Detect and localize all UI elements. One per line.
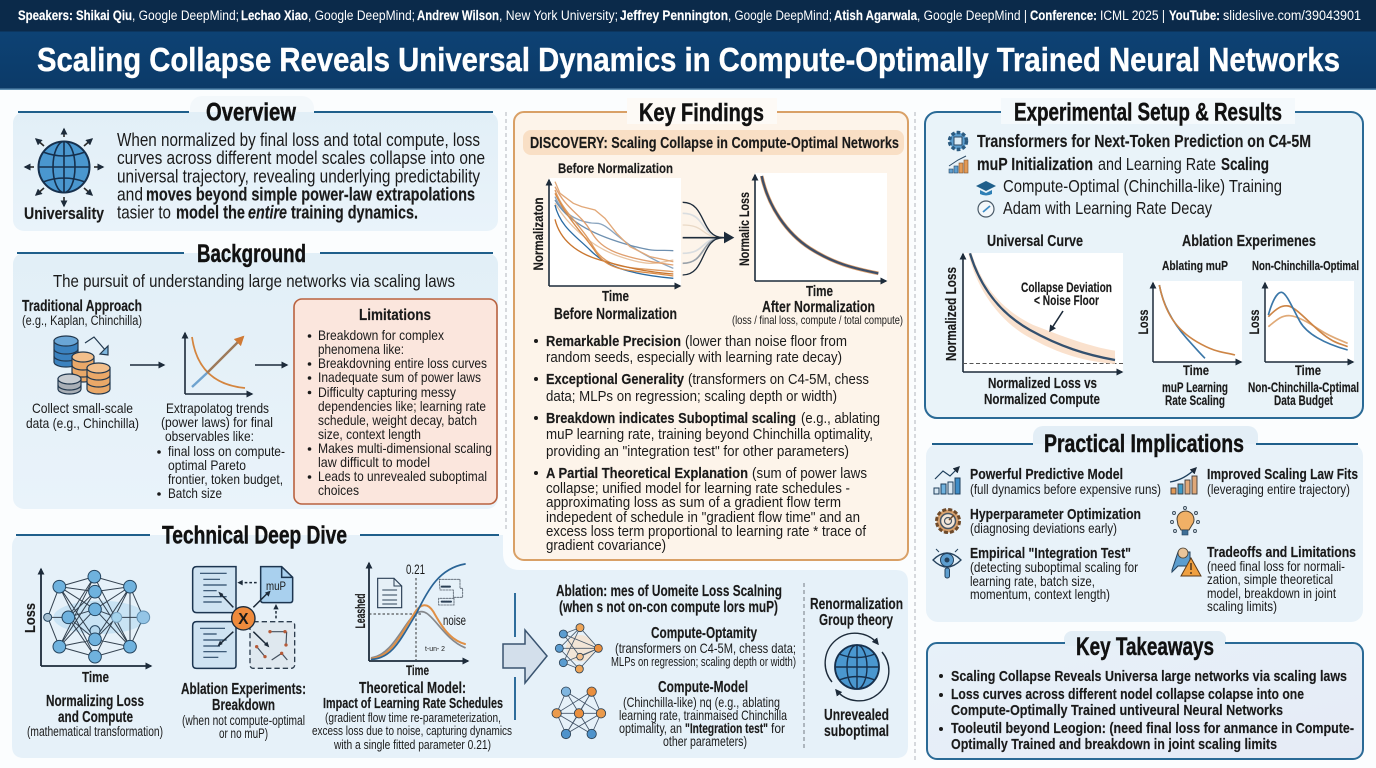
text block: overview: curves across different model scales collapse into one: [117, 148, 485, 168]
panel: limitations: Limitations: [359, 307, 431, 324]
label: unrevealed suboptimal: [824, 707, 889, 740]
caption: ablation experiments: or no muP): [219, 726, 268, 741]
panel: key takeaways: [927, 631, 1363, 759]
item: tradeoffs and limitations: scaling limits): [1207, 598, 1277, 614]
caption: ablation experiments: Ablation Experiments:: [181, 681, 306, 698]
chart: universal curve: Universal Curve: [987, 233, 1083, 250]
chart: power-law trends: [185, 333, 252, 394]
icon: dial: [978, 201, 994, 217]
speakers bar: , Google DeepMind;: [132, 8, 239, 23]
speakers bar: Jeffrey Pennington: [620, 8, 728, 23]
text block: overview: [117, 130, 485, 223]
chart: after normalization: [732, 173, 903, 327]
setup line 2: [977, 154, 1269, 174]
chart: ablating mup: [1135, 258, 1242, 408]
item: predictive model: Powerful Predictive Model: [970, 466, 1123, 483]
text: compute-model: [619, 679, 787, 749]
icon: light bulb: [1170, 506, 1200, 535]
icon: eye magnifier: [933, 549, 961, 578]
text block: takeaways: Loss curves across different nodel collapse colapse into one: [951, 686, 1304, 703]
chart: non-chinchilla-optimal: Data Budget: [1274, 393, 1333, 408]
caption: collect data: Collect small-scale: [32, 400, 133, 416]
arrow: big block arrow: [503, 630, 547, 683]
label: renormalization group theory: [810, 596, 903, 629]
label: unrevealed suboptimal: suboptimal: [824, 723, 889, 740]
text: compute-model: "Integration test": [685, 720, 768, 736]
chart: theoretical model: t-un- 2: [425, 646, 445, 653]
panel: limitations: Leads to unrevealed suboptimal: [318, 468, 487, 484]
setup line 3: Compute-Optimal (Chinchilla-like) Training: [1003, 176, 1282, 196]
chart: ablating mup: Time: [1183, 362, 1209, 378]
chart: ablating mup: Rate Scaling: [1165, 393, 1225, 408]
caption: theoretical model: [312, 680, 512, 752]
text block: findings bullets: muP learning rate, training beyond Chinchilla optimality,: [546, 426, 873, 443]
heading: experimental setup: Experimental Setup & Results: [1014, 98, 1282, 126]
item: tradeoffs and limitations: zation, simple theoretical: [1207, 571, 1333, 587]
chart: theoretical model: 0.21: [406, 562, 425, 577]
discovery banner: DISCOVERY: Scaling Collapse in Compute-Optimal Networks: [530, 135, 899, 152]
text: compute-model: Compute-Model: [658, 679, 748, 696]
icon: compute-optimal network: [555, 624, 602, 673]
chart: before normalization: Normalizaton: [530, 198, 546, 270]
icon: tradeoffs warning: [1172, 548, 1201, 576]
text block: findings bullets: Exceptional Generality: [546, 371, 685, 388]
speakers bar: , Google DeepMind;: [308, 8, 415, 23]
text: compute-model: (Chinchilla-like) nq (e.g., ablating: [623, 694, 780, 710]
item: integration test: [970, 545, 1138, 602]
caption: collect data: data (e.g., Chinchilla): [26, 415, 139, 431]
speakers bar: Lechao Xiao: [241, 8, 308, 23]
chart: before normalization: Before Normalization: [558, 160, 673, 176]
panel: limitations: Breakdovning entire loss curves: [318, 355, 487, 371]
icon: databases: [54, 336, 110, 394]
panel: experimental setup and results: [925, 98, 1363, 418]
chart: theoretical model: Leashed: [352, 594, 368, 628]
text: compute-optamity: Compute-Optamity: [651, 625, 757, 642]
text block: findings bullets: (lower than noise floor from: [685, 333, 847, 350]
speakers bar: [0, 0, 1376, 32]
text block: findings bullets: (transformers on C4-5M, chess: [688, 371, 869, 388]
chart: before normalization: Time: [602, 289, 629, 305]
label: renormalization group theory: Group theory: [819, 612, 893, 629]
item: hyperparameter optimization: [970, 506, 1141, 536]
item: hyperparameter optimization: Hyperparameter Optimization: [970, 506, 1141, 523]
text block: findings bullets: providing an "integration test" for other parameters): [546, 443, 849, 460]
text block: findings bullets: [534, 333, 880, 554]
caption: ablation experiments: [181, 681, 306, 741]
heading: practical implications: Practical Implications: [1044, 430, 1244, 458]
chart: after normalization: Normalic Loss: [736, 192, 752, 266]
icon: mortarboard: [976, 181, 996, 196]
text block: extrapolating trends: Extrapolatog trends: [166, 400, 269, 416]
caption: theoretical model: Theoretical Model:: [359, 680, 466, 697]
text block: overview: and: [117, 185, 143, 205]
text: compute-model: other parameters): [663, 733, 747, 749]
caption: normalizing loss: Normalizing Loss: [46, 693, 144, 710]
subtitle: The pursuit of understanding large networks via scaling laws: [53, 271, 455, 291]
icon: growth bars: [949, 156, 968, 173]
chart: theoretical model: Time: [406, 663, 429, 678]
speakers bar: YouTube:: [1169, 8, 1220, 23]
icon label: universality: Universality: [24, 205, 105, 223]
text block: overview: tasier to: [117, 203, 171, 223]
heading: ablation loss scaling: (when s not on-con compute lors muP): [559, 599, 778, 616]
text block: extrapolating trends: Batch size: [168, 485, 222, 501]
text block: extrapolating trends: [157, 400, 285, 501]
speakers bar: ICML 2025 |: [1100, 8, 1165, 23]
panel: limitations: Breakdown for complex: [318, 327, 444, 343]
text: compute-model: learning rate, trainmaised Chinchilla: [619, 707, 787, 723]
chart: before normalization: Before Normalization: [554, 306, 677, 323]
panel: limitations: size, context length: [318, 426, 421, 442]
panel: key findings: [514, 98, 908, 560]
panel: limitations: schedule, weight decay, batch: [318, 412, 477, 428]
panel: limitations: law difficult to model: [318, 454, 430, 470]
heading: key findings: Key Findings: [639, 99, 764, 127]
traditional approach label: Traditional Approach: [22, 298, 142, 315]
caption: normalizing loss: and Compute: [58, 709, 133, 726]
item: tradeoffs and limitations: model, breakdown in joint: [1207, 585, 1336, 601]
text block: overview: training dynamics.: [291, 203, 418, 223]
speakers bar: Andrew Wilson: [417, 8, 499, 23]
caption: theoretical model: excess loss due to noise, capturing dynamics: [312, 723, 512, 738]
text block: extrapolating trends: optimal Pareto: [168, 457, 246, 473]
text block: findings bullets: indepedent of schedule in "gradient flow time" and an: [546, 509, 860, 526]
text block: findings bullets: (e.g., ablating: [801, 410, 880, 427]
speakers bar: , Google DeepMind |: [917, 8, 1027, 23]
traditional approach label: [22, 298, 142, 328]
caption: theoretical model: with a single fitted parameter 0.21): [333, 737, 491, 752]
item: tradeoffs and limitations: [1207, 544, 1356, 614]
text block: findings bullets: excess loss term proportional to learning rate * trace of: [546, 523, 867, 540]
arrow: collapse funnel: [683, 202, 734, 275]
diagram: network on loss axes: Loss: [22, 603, 39, 633]
discovery banner: [523, 130, 904, 155]
diagram: network on loss axes: Time: [82, 670, 109, 686]
traditional approach label: (e.g., Kaplan, Chinchilla): [22, 313, 142, 328]
chart: after normalization: Time: [806, 284, 833, 300]
diagram: ablation breakdown: muP: [266, 579, 286, 593]
item: predictive model: [970, 466, 1161, 497]
text block: findings bullets: random seeds, especially with learning rate decay): [546, 349, 842, 366]
panel: limitations: phenomena like:: [318, 341, 404, 357]
text block: extrapolating trends: observables like:: [165, 428, 254, 444]
text block: takeaways: Compute-Optimally Trained untiveural Neural Networks: [951, 702, 1283, 719]
text block: extrapolating trends: (power laws) for final: [161, 414, 273, 430]
text block: overview: entire: [248, 203, 287, 223]
chart: universal curve: Collapse Deviation: [1021, 280, 1112, 295]
text block: findings bullets: Remarkable Precision: [546, 333, 681, 350]
heading: ablation loss scaling: Ablation: mes of Uomeite Loss Scalning: [556, 583, 782, 600]
caption: normalizing loss: (mathematical transformation): [27, 724, 163, 739]
item: scaling law fits: [1207, 466, 1358, 497]
diagram: network on loss axes: [22, 569, 151, 686]
item: hyperparameter optimization: (diagnosing deviations early): [970, 520, 1117, 536]
heading: key takeaways: Key Takeaways: [1076, 633, 1214, 661]
chart: ablating mup: muP Learning: [1162, 380, 1228, 395]
item: integration test: learning rate, batch size,: [970, 573, 1095, 589]
text: compute-optamity: (transformers on C4-5M, chess data;: [615, 640, 796, 656]
speakers bar: slideslive.com/39043901: [1223, 8, 1361, 23]
text block: findings bullets: A Partial Theoretical Explanation: [546, 465, 748, 482]
chart: after normalization: After Normalization: [762, 299, 875, 316]
item: tradeoffs and limitations: (need final loss for normali-: [1207, 558, 1345, 574]
text: compute-optamity: MLPs on regression; scaling depth or width): [611, 654, 796, 669]
icon: globe with cycle arrows: [825, 633, 889, 701]
speakers bar: , New York University;: [499, 8, 618, 23]
text block: findings bullets: approximating loss as sum of a gradient flow term: [546, 494, 841, 511]
title banner: [0, 32, 1376, 90]
diagram: ablation breakdown: X: [238, 611, 249, 628]
setup line 2: and Learning Rate: [1098, 154, 1216, 174]
speakers bar: Atish Agarwala: [834, 8, 917, 23]
panel: limitations: Difficulty capturing messy: [318, 384, 456, 400]
panel: overview: [13, 96, 498, 231]
text block: findings bullets: collapse; unified model for learning rate schedules -: [546, 480, 850, 497]
text: compute-model: for: [771, 720, 785, 736]
text block: overview: model the: [176, 203, 245, 223]
chart: theoretical model: [352, 562, 468, 678]
item: predictive model: (full dynamics before expensive runs): [970, 481, 1161, 497]
icon: predictive chart: [934, 467, 960, 494]
chart: before normalization: [530, 160, 681, 323]
caption: theoretical model: Impact of Learning Rate Schedules: [323, 696, 503, 712]
arrow: data to trends: [130, 364, 164, 366]
chart: non-chinchilla-optimal: [1246, 258, 1359, 408]
panel: practical implications: [926, 426, 1363, 622]
panel: background: [13, 240, 498, 509]
chart: ablating mup: Loss: [1135, 309, 1151, 334]
diagram: ablation breakdown: [193, 567, 295, 668]
setup line 4: Adam with Learning Rate Decay: [1003, 198, 1212, 218]
chart: universal curve: [943, 233, 1123, 408]
text block: overview: When normalized by final loss and total compute, loss: [117, 130, 480, 150]
setup line 2: muP Initialization: [977, 154, 1093, 174]
chart: after normalization: (loss / final loss, compute / total compute): [732, 313, 903, 327]
text: compute-optamity: [611, 625, 796, 669]
text block: findings bullets: (sum of power laws: [752, 465, 867, 482]
item: integration test: Empirical "Integration Test": [970, 545, 1131, 562]
speakers bar: Speakers: Shikai Qiu: [18, 8, 132, 23]
panel: limitations: choices: [318, 482, 359, 498]
text block: extrapolating trends: final loss on compute-: [168, 443, 285, 459]
caption: ablation experiments: Breakdown: [212, 697, 275, 714]
panel: limitations: dependencies like; learning rate: [318, 398, 486, 414]
icon: gear chip: [950, 132, 966, 150]
panel: limitations: Inadequate sum of power laws: [318, 369, 481, 385]
text block: findings bullets: data; MLPs on regression; scaling depth or width): [546, 388, 837, 405]
caption: normalizing loss: [27, 693, 163, 739]
chart: non-chinchilla-optimal: Loss: [1246, 309, 1262, 334]
text block: findings bullets: Breakdown indicates Suboptimal scaling: [546, 410, 796, 427]
panel: technical deep dive: [12, 522, 908, 758]
icon: compute-model network: [552, 687, 606, 739]
chart: ablating mup: Ablating muP: [1162, 258, 1228, 273]
text block: findings bullets: gradient covariance): [546, 537, 666, 554]
caption: collect data: [26, 400, 139, 431]
chart: non-chinchilla-optimal: Time: [1295, 362, 1321, 378]
text block: overview: moves beyond simple power-law extrapolations: [146, 185, 475, 205]
text: compute-model: optimality, an: [619, 720, 682, 736]
speakers bar: , Google DeepMind;: [728, 8, 832, 23]
setup line 2: Scaling: [1221, 154, 1269, 174]
speakers bar: Conference:: [1030, 8, 1097, 23]
text block: takeaways: Optimally Trained and breakdown in joint scaling limits: [951, 736, 1277, 753]
item: integration test: momentum, context length): [970, 586, 1110, 602]
heading: ablation experiments: Ablation Experimenes: [1182, 233, 1316, 250]
icon: gear target: [936, 510, 960, 532]
caption: ablation experiments: (when not compute-optimal: [182, 713, 305, 728]
text block: overview: universal trajectory, revealing underlying predictability: [117, 166, 480, 186]
chart: theoretical model: noise: [443, 613, 466, 628]
caption: theoretical model: (gradient flow time re-parameterization,: [325, 710, 501, 725]
chart: universal curve: < Noise Floor: [1034, 293, 1100, 308]
chart: universal curve: Normalized Compute: [984, 391, 1100, 408]
icon: globe with radial arrows: [25, 129, 103, 206]
text block: takeaways: [939, 668, 1354, 753]
label: renormalization group theory: Renormalization: [810, 596, 903, 613]
text block: extrapolating trends: frontier, token budget,: [168, 471, 283, 487]
heading: background: Background: [197, 240, 306, 268]
item: integration test: (detecting suboptimal scaling for: [970, 559, 1138, 575]
panel: limitations: Makes multi-dimensional scaling: [318, 440, 492, 456]
heading: technical deep dive: Technical Deep Dive: [162, 522, 347, 550]
chart: universal curve: Normalized Loss: [943, 267, 960, 361]
panel: limitations: [294, 299, 497, 504]
heading: ablation loss scaling: [556, 583, 782, 616]
heading: overview: Overview: [206, 98, 296, 126]
chart: universal curve: Normalized Loss vs: [988, 375, 1097, 392]
arrow: trends to limitations: [255, 364, 287, 366]
icon: scaling chart: [1170, 468, 1197, 494]
label: unrevealed suboptimal: Unrevealed: [824, 707, 889, 724]
